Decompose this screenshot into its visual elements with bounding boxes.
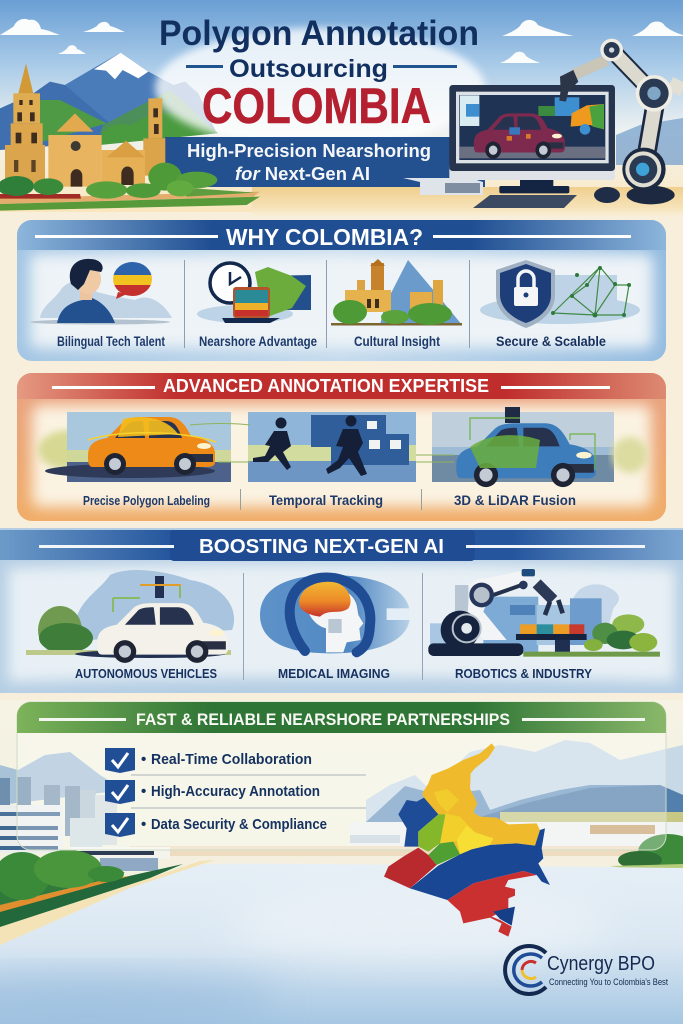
icon: person with speech bubble: [30, 259, 172, 324]
heading band: ADVANCED ANNOTATION EXPERTISE: [163, 376, 489, 396]
panel: Boosting Next-Gen AI: [0, 528, 683, 693]
label: nearshore advantage: Nearshore Advantage: [199, 334, 317, 349]
banner text line 1: High-Precision Nearshoring: [187, 140, 431, 161]
icon: clock and map: [197, 263, 311, 323]
column: cultural insight: [331, 259, 462, 349]
item: high-accuracy annotation: High-Accuracy Annotation: [151, 783, 320, 800]
icon: head and brain: [260, 575, 410, 653]
background scenery: [0, 740, 683, 1024]
panel: Why Colombia: [17, 220, 666, 361]
column: medical imaging: [260, 575, 410, 681]
column: bilingual talent: [30, 259, 172, 349]
bushes and ground: [0, 163, 260, 211]
buildings: [0, 777, 170, 871]
label: 3D and LiDAR fusion: 3D & LiDAR Fusion: [454, 493, 576, 508]
logo name: Cynergy BPO: [547, 953, 655, 975]
horizon band: [130, 846, 683, 856]
card: temporal tracking: [248, 412, 416, 508]
subtitle banner: [165, 137, 485, 187]
item: real-time collaboration: [105, 748, 312, 773]
logo: Cynergy BPO: [505, 946, 668, 994]
item: real-time collaboration: Real-Time Collaboration: [151, 751, 312, 768]
mountains: [0, 53, 218, 150]
logo mark: [505, 946, 546, 994]
image: orange car: [38, 412, 231, 482]
label: bilingual tech talent: Bilingual Tech Talent: [57, 334, 165, 349]
item: data security and compliance: •: [141, 816, 146, 833]
icon: industrial robot: [428, 569, 660, 657]
computer monitor: [449, 85, 615, 193]
panel: Advanced Annotation Expertise: [17, 373, 666, 521]
heading band: FAST & RELIABLE NEARSHORE PARTNERSHIPS: [136, 710, 510, 729]
mouse: [594, 187, 620, 203]
image: runners: [248, 412, 416, 482]
church illustration: [5, 63, 165, 187]
left shore: [0, 850, 215, 945]
water: [0, 864, 683, 1024]
server box: [403, 178, 483, 195]
heading band: [0, 530, 683, 561]
robotic arm: [559, 39, 683, 204]
heading band: [17, 702, 666, 733]
label: precise polygon labeling: Precise Polygon Labeling: [83, 493, 210, 508]
icon: self-driving car: [26, 570, 234, 663]
label: temporal tracking: Temporal Tracking: [269, 493, 383, 508]
label: cultural insight: Cultural Insight: [354, 334, 440, 349]
item: real-time collaboration: •: [141, 751, 146, 768]
heading band: BOOSTING NEXT-GEN AI: [199, 536, 444, 558]
checklist: [105, 748, 366, 837]
item: high-accuracy annotation: •: [141, 783, 146, 800]
clouds: [0, 19, 683, 63]
title glow: [155, 28, 485, 148]
label: robotics and industry: ROBOTICS & INDUSTRY: [455, 666, 592, 681]
banner text line 2: for Next-Gen AI: [235, 163, 370, 184]
panel box: [17, 702, 666, 850]
label: medical imaging: MEDICAL IMAGING: [278, 666, 390, 681]
keyboard: [473, 195, 577, 208]
card: 3D and LiDAR fusion: [432, 407, 648, 508]
heading: Outsourcing: [186, 55, 457, 83]
heading: Colombia: COLOMBIA: [202, 78, 431, 134]
heading: Polygon Annotation: Polygon Annotation: [159, 14, 479, 53]
label: autonomous vehicles: AUTONOMOUS VEHICLES: [75, 666, 217, 681]
item: data security and compliance: [105, 813, 327, 837]
column: robotics and industry: [428, 569, 660, 681]
heading band: WHY COLOMBIA?: [226, 224, 423, 250]
runner right: [326, 416, 367, 476]
card: precise polygon labeling: [38, 412, 231, 508]
runner left: [253, 418, 291, 470]
icon: shield and network: [480, 260, 640, 328]
column: nearshore advantage: [197, 263, 317, 349]
monitor screen: [456, 92, 609, 163]
column: secure and scalable: [480, 260, 640, 349]
header illustration: [0, 0, 683, 216]
right trees: [610, 834, 683, 878]
item: data security and compliance: Data Security & Compliance: [151, 816, 327, 833]
heading band: [17, 373, 666, 399]
car on screen: [474, 113, 565, 159]
item: high-accuracy annotation: [105, 780, 320, 804]
image: LiDAR car: [432, 407, 648, 487]
map of Colombia: [384, 743, 550, 937]
label: secure and scalable: Secure & Scalable: [496, 334, 606, 349]
heading band: [17, 220, 666, 250]
panel: Fast and Reliable Nearshore Partnerships: [0, 700, 683, 1024]
mountains right: [616, 118, 683, 165]
heading: Outsourcing: Outsourcing: [229, 55, 388, 83]
column: autonomous vehicles: [26, 570, 234, 681]
icon: colonial town: [331, 259, 462, 326]
